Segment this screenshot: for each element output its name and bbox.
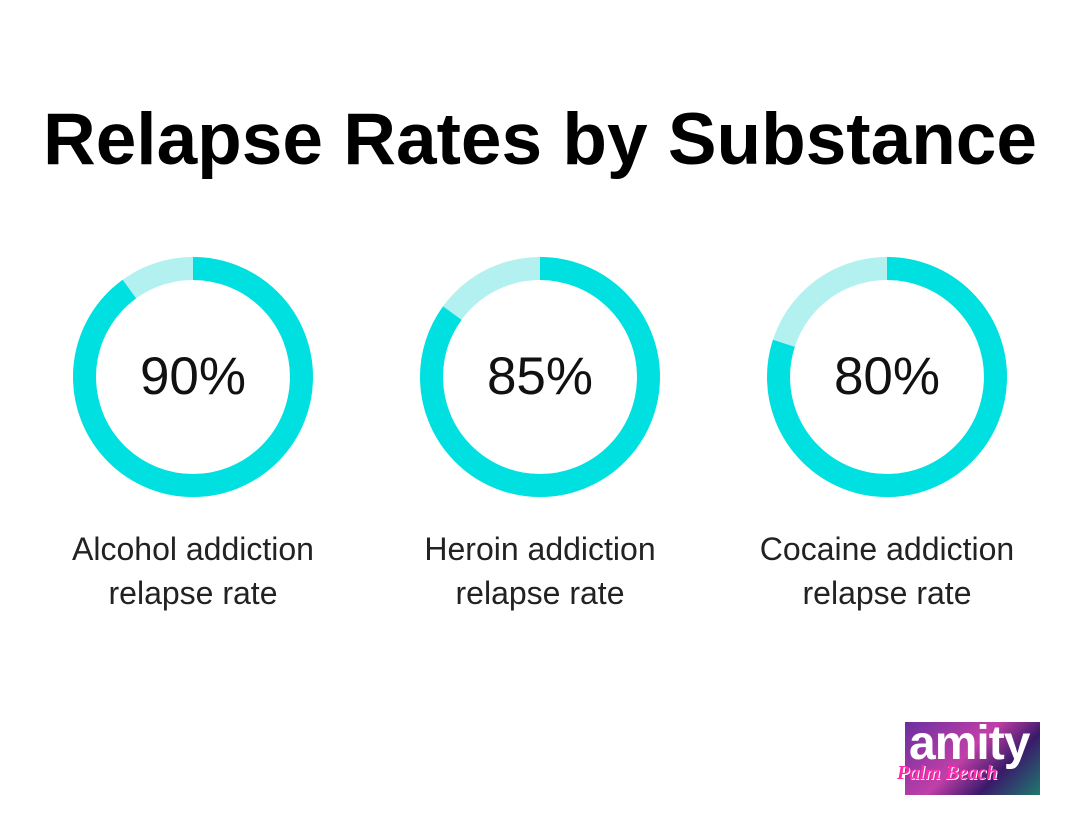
label: heroin: relapse rate <box>456 575 624 611</box>
ring: heroin 85% <box>420 257 660 497</box>
logo <box>905 722 1040 795</box>
label: cocaine <box>760 531 1014 611</box>
ring: alcohol 90%: 90% <box>140 347 246 406</box>
logo: amity <box>909 717 1029 770</box>
label: alcohol: Alcohol addiction <box>72 531 314 567</box>
label: heroin <box>424 531 656 611</box>
label: alcohol <box>72 531 314 611</box>
ring: cocaine 80% <box>767 257 1007 497</box>
label: cocaine: Cocaine addiction <box>760 531 1014 567</box>
logo: Palm Beach <box>897 762 998 784</box>
label: alcohol: relapse rate <box>108 575 277 611</box>
ring: heroin 85%: 85% <box>487 347 593 406</box>
ring: cocaine 80%: 80% <box>834 347 940 406</box>
label: cocaine: relapse rate <box>802 575 971 611</box>
title: Relapse Rates by Substance <box>43 99 1037 180</box>
ring: alcohol 90% <box>73 257 313 497</box>
label: heroin: Heroin addiction <box>424 531 656 567</box>
